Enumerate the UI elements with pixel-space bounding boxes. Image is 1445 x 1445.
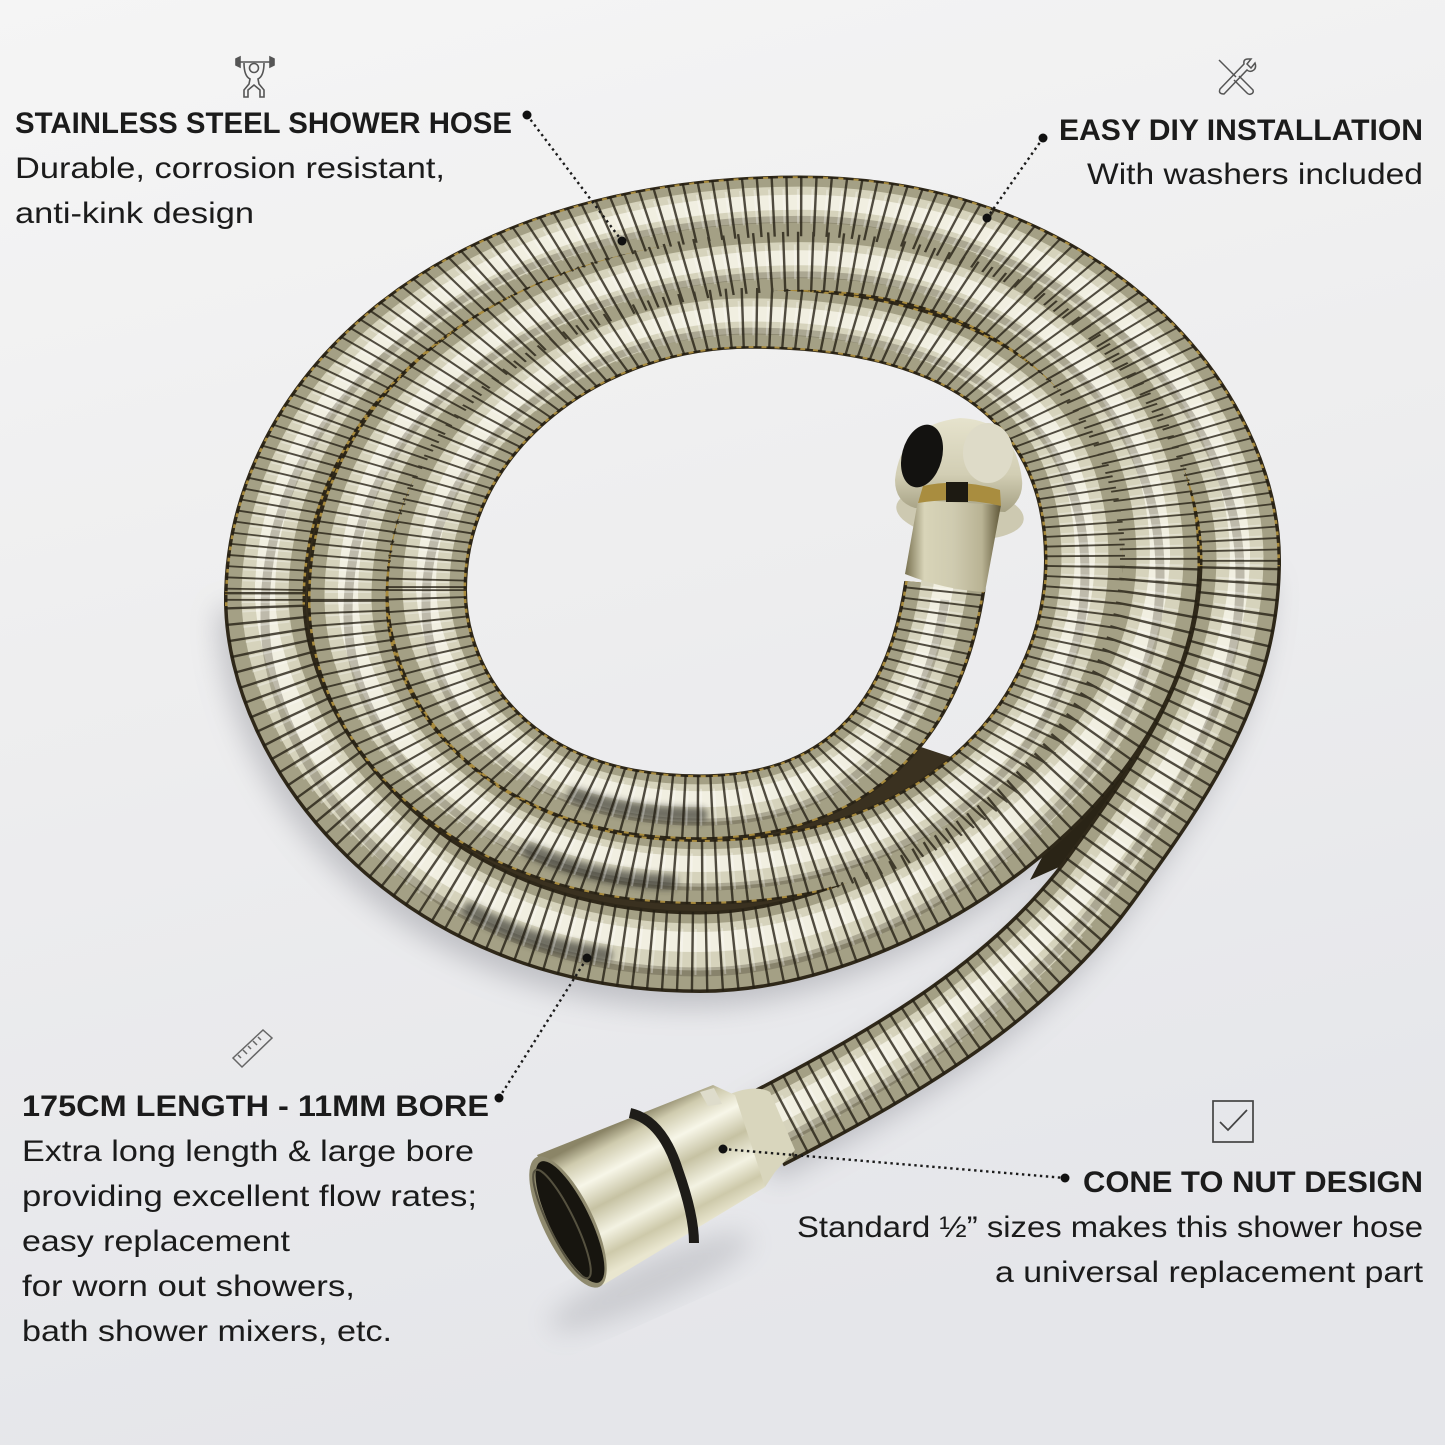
connector: threaded mouth	[514, 1146, 622, 1298]
swivel fitting at hose top	[894, 418, 1026, 592]
callout: length and bore	[22, 954, 592, 1348]
connector: cone	[730, 1088, 795, 1187]
connector: top edge highlight	[700, 1088, 722, 1106]
description	[22, 1135, 477, 1348]
fitting: ball body	[895, 418, 1022, 512]
heading: STAINLESS STEEL SHOWER HOSE	[15, 107, 512, 140]
callout: easy DIY installation	[982, 59, 1423, 222]
leader line	[718, 1144, 1070, 1182]
fitting: neck cylinder	[905, 500, 1001, 592]
end connector	[514, 1085, 795, 1298]
fitting: gold collar	[918, 483, 1001, 506]
description: anti-kink design	[15, 197, 254, 230]
icon: checkbox	[1213, 1101, 1253, 1142]
fitting: water outlet	[894, 420, 950, 492]
dark reflections on the lower coils	[470, 795, 700, 955]
hose shadow	[257, 576, 1232, 1146]
description: Standard ½” sizes makes this shower hose	[797, 1211, 1423, 1244]
icon: crossed tools	[1219, 59, 1256, 94]
fitting: flat face	[963, 423, 1013, 483]
callout: stainless steel shower hose	[15, 57, 626, 246]
leader line	[522, 110, 626, 246]
connector: black O-ring	[630, 1113, 694, 1243]
heading: 175CM LENGTH - 11MM BORE	[22, 1090, 489, 1123]
description	[797, 1211, 1424, 1289]
description: Extra long length & large bore	[22, 1135, 474, 1168]
icon: ruler	[233, 1030, 272, 1067]
leader line	[982, 134, 1048, 222]
fitting: flange	[894, 480, 1026, 546]
heading: CONE TO NUT DESIGN	[1083, 1166, 1423, 1199]
photo: coiled stainless steel shower hose	[265, 202, 1240, 1150]
shadow under end fitting	[541, 1217, 759, 1347]
description: bath shower mixers, etc.	[22, 1315, 392, 1348]
description: a universal replacement part	[995, 1256, 1424, 1289]
connector: nut body	[537, 1085, 765, 1285]
description: providing excellent flow rates;	[22, 1180, 477, 1213]
icon: weightlifter	[236, 57, 274, 97]
heading: EASY DIY INSTALLATION	[1059, 114, 1423, 147]
description: Durable, corrosion resistant,	[15, 152, 445, 185]
leader line	[494, 954, 592, 1102]
callout: cone to nut design	[718, 1101, 1424, 1289]
description	[15, 152, 445, 230]
description: With washers included	[1087, 158, 1423, 191]
description: for worn out showers,	[22, 1270, 355, 1303]
description: easy replacement	[22, 1225, 291, 1258]
